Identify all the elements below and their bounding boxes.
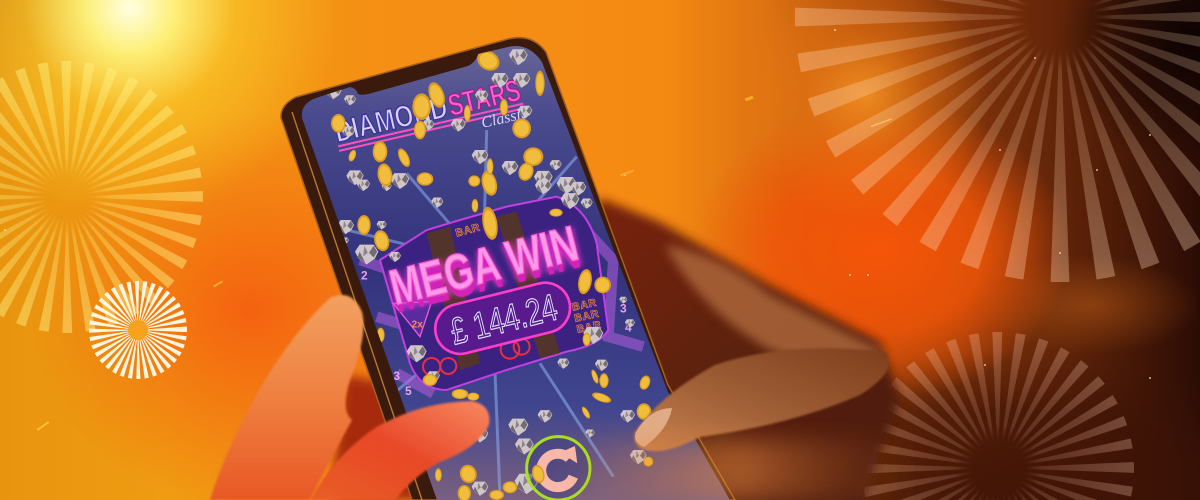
- bar symbol lower stack: [572, 298, 602, 334]
- win multiplier symbol: [393, 302, 432, 337]
- sunburst: large top right: [928, 0, 1192, 150]
- line number right 4: 4: [625, 321, 632, 335]
- left hand: back finger: [210, 295, 364, 500]
- diamonds: [325, 49, 647, 496]
- film dust specks: [4, 29, 1151, 431]
- mega win shadow: MEGA WIN: [386, 223, 586, 324]
- pill shape: [434, 281, 572, 356]
- spin arrow: [541, 454, 573, 487]
- spin coin: [530, 463, 547, 485]
- win amount pill: [434, 281, 572, 356]
- reel columns: [427, 212, 560, 370]
- bar one: BAR: [571, 297, 598, 314]
- bar two: BAR: [573, 308, 600, 325]
- bar three: BAR: [576, 319, 603, 336]
- sunburst: bottom right: [930, 400, 1066, 500]
- line number 2: 2: [361, 268, 368, 282]
- right hand: back of hand behind phone: [560, 198, 900, 500]
- reel frame: [380, 197, 608, 390]
- mega win headline: MEGA WIN: [384, 215, 584, 316]
- left hand: thumb: [310, 401, 489, 500]
- left hand: dark palm behind phone: [330, 375, 430, 500]
- right hand: lower finger: [634, 348, 889, 451]
- win amount: £ 144.24: [446, 286, 561, 353]
- line number 5: 5: [405, 384, 412, 398]
- game logo: [336, 80, 528, 152]
- spin button: [527, 437, 590, 500]
- reel side glow: [360, 217, 643, 393]
- game content in zoomed coordinates: [325, 47, 653, 500]
- cherries: [423, 339, 530, 375]
- multiplier label: 2x: [412, 319, 423, 330]
- logo classic script: Classic: [480, 105, 529, 132]
- left hand: [210, 295, 489, 500]
- phone side edge highlight: [292, 112, 422, 500]
- logo stars word: STARS: [445, 73, 524, 123]
- payline numbers: [361, 268, 632, 398]
- light rays: [347, 130, 613, 497]
- phone: [280, 30, 740, 500]
- line number 3: 3: [393, 369, 400, 383]
- line number right 3: 3: [620, 302, 627, 316]
- spin arrow head: [560, 446, 577, 463]
- right hand: [560, 245, 920, 500]
- bar symbols: [454, 221, 603, 336]
- gold coins: [331, 47, 653, 500]
- logo diamond word: DIAMOND: [331, 90, 451, 149]
- spin button ring: [527, 437, 590, 500]
- logo underline: [338, 104, 524, 151]
- right hand: lower haze: [560, 440, 920, 500]
- right hand: upper blurred finger: [665, 245, 885, 363]
- phone body: [281, 38, 735, 500]
- bar symbol upper: BAR: [454, 221, 482, 240]
- phone screen: [302, 46, 730, 500]
- sunburst: left yellow: [0, 129, 135, 265]
- mega win glow: MEGA WIN: [385, 219, 585, 320]
- screen background: [302, 46, 730, 500]
- sunburst: small white: [114, 306, 162, 354]
- right hand: fingernail: [635, 408, 672, 447]
